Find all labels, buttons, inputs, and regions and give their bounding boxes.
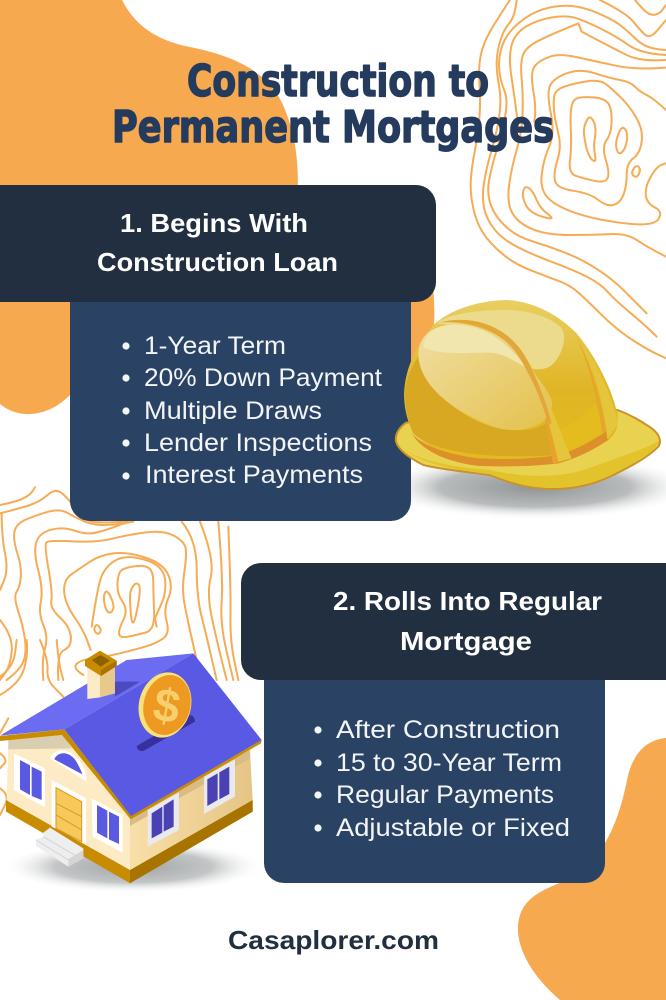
title: Construction to (187, 56, 489, 107)
list: step 2 features: After Construction (336, 716, 560, 744)
panel: step 2 body (264, 660, 605, 883)
background blob: top left (0, 0, 434, 414)
base (6, 800, 253, 883)
gloss (418, 325, 552, 430)
list: step 1 features: 1-Year Term (144, 332, 286, 360)
contour lines: bottom left (0, 487, 238, 680)
panel: step 1 body (70, 280, 411, 521)
door (52, 780, 86, 843)
panel: step 2 heading: 2. Rolls Into Regular (333, 586, 602, 616)
panel: step 2 heading (241, 563, 666, 680)
list: step 1 features: Interest Payments (145, 461, 363, 489)
panel: step 2 heading: Mortgage (400, 626, 532, 656)
icon: house with coin (0, 651, 265, 893)
contour lines: top right (471, 0, 666, 359)
top highlight (437, 310, 564, 369)
list: step 2 features (314, 716, 570, 842)
right rib (575, 333, 618, 439)
title (112, 56, 554, 153)
steps (36, 828, 83, 867)
coin slot (137, 715, 195, 751)
background blob: bottom right (518, 738, 666, 1000)
hat shadow (375, 454, 666, 520)
panel: step 1 heading: Construction Loan (97, 247, 338, 277)
list: step 1 features: 20% Down Payment (144, 364, 382, 392)
coin: $ (150, 678, 184, 734)
windows (14, 753, 45, 807)
walls (7, 735, 130, 870)
chin band (412, 430, 608, 466)
dome shading (405, 357, 557, 456)
roof (0, 653, 193, 736)
arched window (50, 751, 87, 782)
list: step 1 features: Multiple Draws (144, 397, 322, 425)
icon: hard hat (396, 300, 660, 489)
list: step 2 features: 15 to 30-Year Term (336, 749, 562, 777)
list: step 2 features: Regular Payments (336, 781, 554, 809)
contour lines: left of house (0, 640, 63, 815)
list: step 2 features: Adjustable or Fixed (336, 814, 570, 842)
centre rib (440, 320, 572, 462)
list: step 1 features: Lender Inspections (144, 429, 372, 457)
panel: step 1 heading (0, 185, 436, 302)
title: Permanent Mortgages (112, 102, 554, 153)
panel: step 1 heading: 1. Begins With (120, 208, 308, 238)
list: step 1 features (122, 332, 382, 489)
coin (132, 667, 198, 743)
footer: website: Casaplorer.com (228, 925, 439, 955)
chimney (115, 682, 140, 697)
